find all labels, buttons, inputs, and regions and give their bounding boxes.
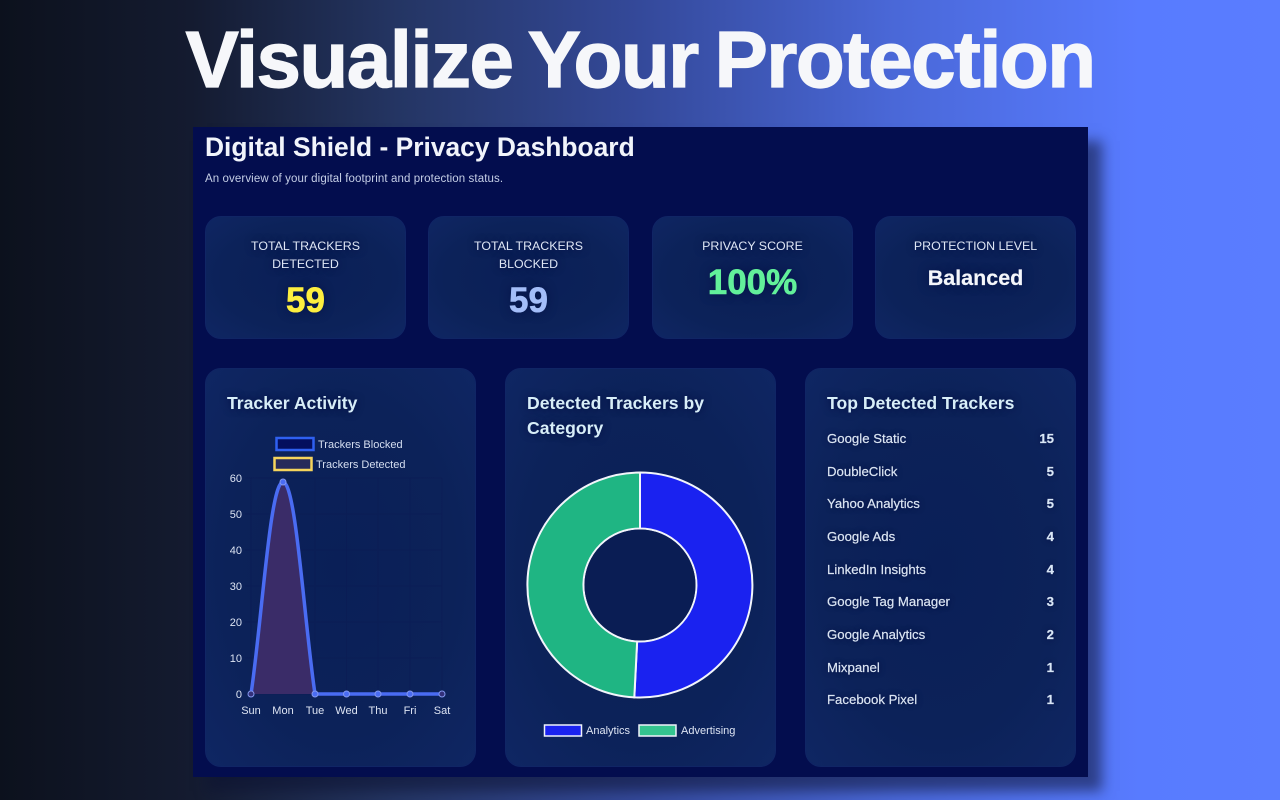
tracker row <box>827 562 1054 577</box>
data points <box>248 479 445 697</box>
stat value: 59 <box>286 281 325 320</box>
stat card: privacy score <box>652 216 853 339</box>
tracker row: Mixpanel <box>827 660 880 675</box>
x axis labels: Tue <box>306 705 324 717</box>
y axis labels <box>230 473 242 701</box>
tracker row: Facebook Pixel <box>827 692 917 707</box>
x axis labels: Mon <box>272 705 294 717</box>
donut legend: analytics: Analytics <box>586 725 631 737</box>
legend: trackers detected: Trackers Detected <box>316 459 405 471</box>
tracker row <box>827 692 1054 707</box>
y axis labels: 20 <box>230 617 242 629</box>
stat label: TOTAL TRACKERS <box>474 239 583 253</box>
panel heading: Tracker Activity <box>227 393 357 413</box>
donut legend: advertising <box>639 725 735 737</box>
legend: trackers blocked: Trackers Blocked <box>318 439 403 451</box>
tracker row: Google Ads <box>827 529 895 544</box>
slice: advertising <box>527 472 640 697</box>
x axis labels: Wed <box>335 705 358 717</box>
y axis labels: 40 <box>230 545 242 557</box>
stat value: 100% <box>708 263 797 302</box>
panel heading: Top Detected Trackers <box>827 393 1014 413</box>
title: Visualize Your Protection <box>185 15 1095 104</box>
panel heading: Detected Trackers by Category <box>527 393 704 438</box>
stat label: TOTAL TRACKERS <box>251 239 360 253</box>
x axis labels <box>241 705 450 717</box>
slice: analytics <box>634 472 752 698</box>
tracker row: 5 <box>1047 464 1054 479</box>
stat label <box>474 239 583 271</box>
stat label: BLOCKED <box>499 257 558 271</box>
y axis labels: 60 <box>230 473 242 485</box>
dashboard heading: Digital Shield - Privacy Dashboard <box>205 132 635 162</box>
tracker row: 1 <box>1047 660 1054 675</box>
tracker row <box>827 594 1054 609</box>
y axis labels: 10 <box>230 653 242 665</box>
donut hole <box>584 530 696 640</box>
tracker row: 15 <box>1039 431 1054 446</box>
tracker row: 4 <box>1047 529 1054 544</box>
detected area <box>251 482 315 694</box>
y axis labels: 30 <box>230 581 242 593</box>
donut legend: advertising: Advertising <box>681 725 735 737</box>
tracker row <box>827 431 1054 446</box>
tracker row: 2 <box>1047 627 1054 642</box>
stat card: total trackers detected <box>205 216 406 339</box>
tracker row: LinkedIn Insights <box>827 562 926 577</box>
stat label: DETECTED <box>272 257 339 271</box>
x axis labels: Fri <box>404 705 416 717</box>
x axis labels: Sun <box>241 705 261 717</box>
donut chart: category <box>527 472 752 698</box>
tracker row: Yahoo Analytics <box>827 496 920 511</box>
tracker row: 4 <box>1047 562 1054 577</box>
stat value: Balanced <box>928 266 1023 290</box>
tracker row <box>827 627 1054 642</box>
stat card: total trackers blocked <box>428 216 629 339</box>
donut legend: analytics <box>544 725 631 737</box>
tracker row: 3 <box>1047 594 1054 609</box>
tracker row: 1 <box>1047 692 1054 707</box>
y axis labels: 0 <box>236 689 242 701</box>
x axis labels: Sat <box>434 705 450 717</box>
tracker row <box>827 464 1054 479</box>
stat label: PRIVACY SCORE <box>702 239 803 253</box>
panel: detected trackers by category <box>505 368 776 767</box>
y axis labels: 50 <box>230 509 242 521</box>
tracker row: DoubleClick <box>827 464 897 479</box>
tracker row: Google Analytics <box>827 627 925 642</box>
tracker row: 5 <box>1047 496 1054 511</box>
line chart: tracker activity <box>230 438 450 717</box>
stat label: PROTECTION LEVEL <box>914 239 1037 253</box>
panel: top detected trackers <box>805 368 1076 767</box>
stat value: 59 <box>509 281 548 320</box>
panel: tracker activity <box>205 368 476 767</box>
panel: dashboard <box>193 127 1088 777</box>
legend: trackers detected <box>274 458 405 471</box>
tracker row: Google Tag Manager <box>827 594 950 609</box>
stat label <box>251 239 360 271</box>
stat card: protection level <box>875 216 1076 339</box>
x axis labels: Thu <box>369 705 387 717</box>
blocked line <box>251 482 442 694</box>
tracker row <box>827 660 1054 675</box>
legend: trackers blocked <box>276 438 403 451</box>
tracker row <box>827 496 1054 511</box>
tracker row: Google Static <box>827 431 906 446</box>
dashboard subtitle: An overview of your digital footprint and protection status. <box>205 173 503 185</box>
tracker row <box>827 529 1054 544</box>
